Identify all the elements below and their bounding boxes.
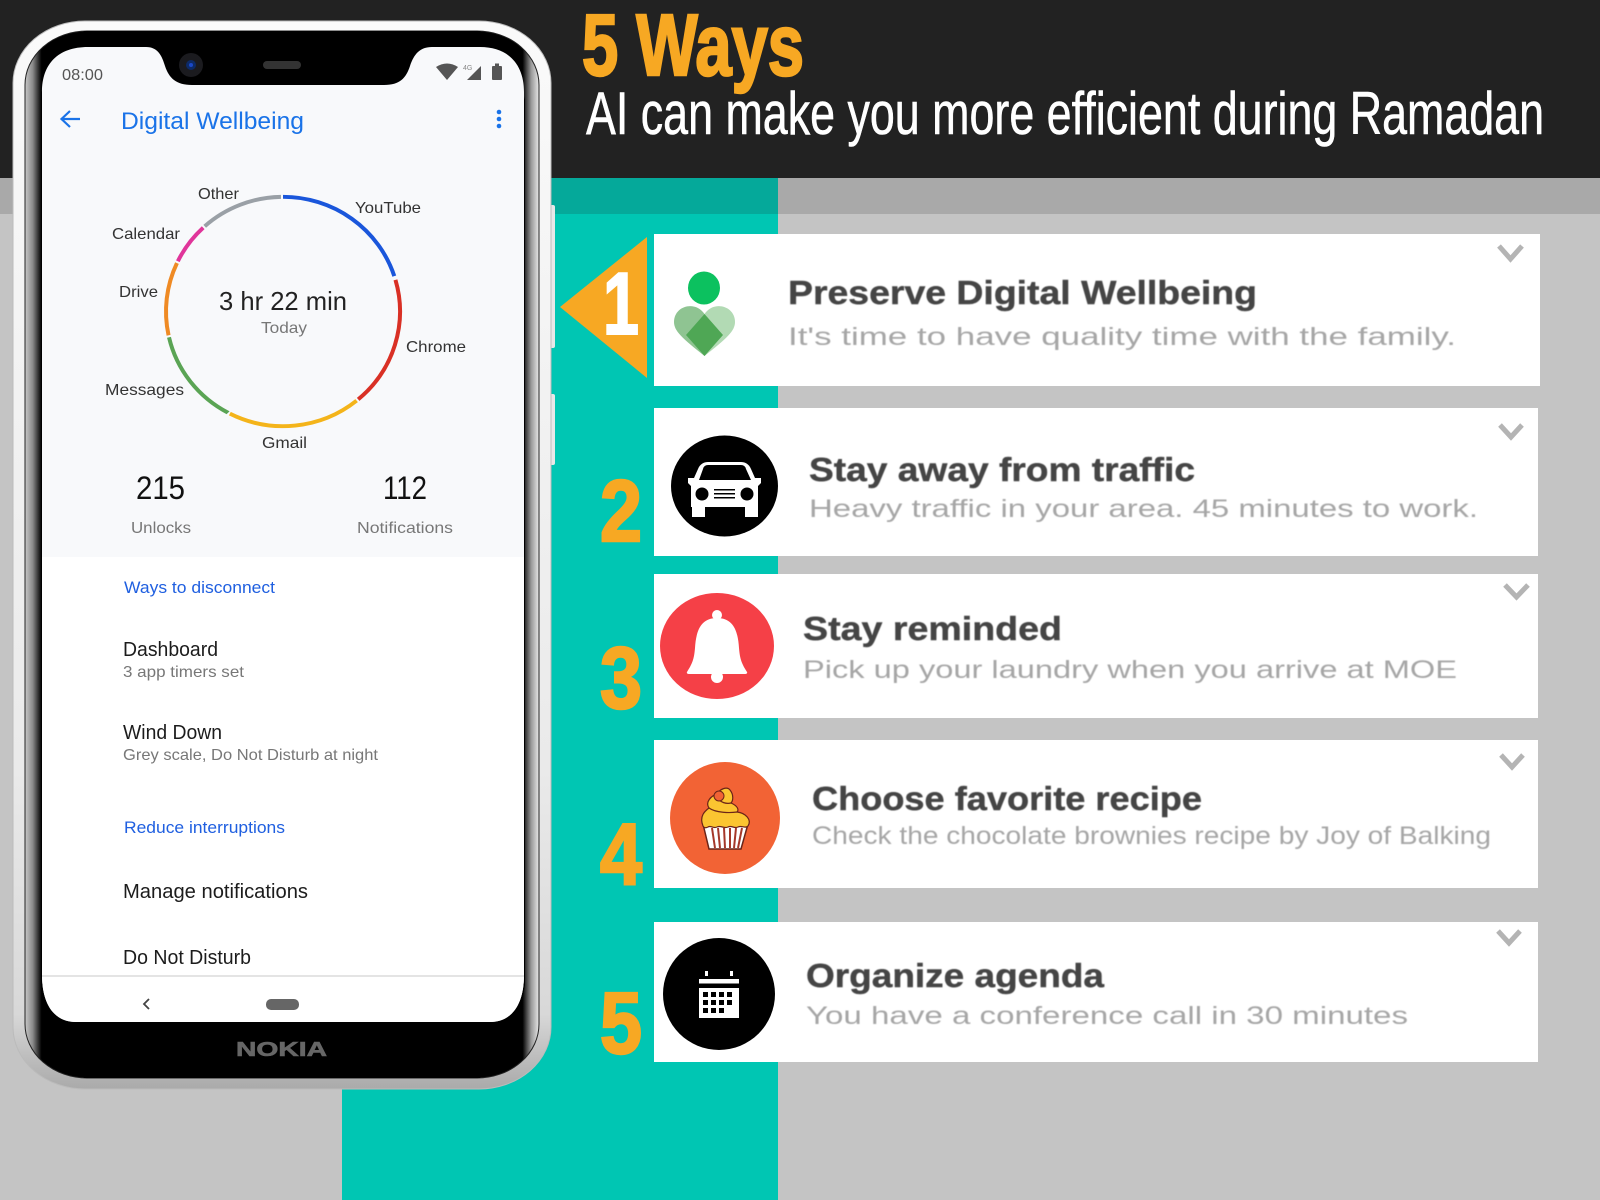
phone frame bbox=[13, 21, 551, 1089]
icon: chevron bbox=[1499, 246, 1522, 259]
settings list: Grey scale, Do Not Disturb at night bbox=[123, 747, 379, 764]
phone screen bbox=[42, 47, 524, 1022]
speaker bbox=[263, 61, 301, 69]
heading: Organize agenda bbox=[806, 957, 1105, 994]
heading: Choose favorite recipe bbox=[812, 780, 1202, 817]
ring labels: Messages bbox=[105, 382, 184, 399]
status time: 08:00 bbox=[62, 67, 103, 84]
status icons: 4G bbox=[463, 65, 472, 72]
icon: chevron bbox=[1501, 755, 1523, 767]
ring labels: Other bbox=[198, 186, 240, 203]
settings list: Manage notifications bbox=[123, 881, 308, 903]
panel: stay away from traffic bbox=[654, 408, 1538, 556]
ring labels: YouTube bbox=[355, 200, 421, 217]
ring centre total bbox=[219, 286, 347, 337]
description: You have a conference call in 30 minutes bbox=[806, 1002, 1408, 1030]
back arrow bbox=[62, 111, 80, 127]
panel: choose favorite recipe bbox=[654, 740, 1538, 888]
number 2: 2 bbox=[600, 463, 642, 560]
ring centre total: Today bbox=[261, 320, 307, 337]
settings list: Reduce interruptions bbox=[124, 819, 285, 837]
number 4: 4 bbox=[600, 806, 642, 903]
ring labels: Drive bbox=[119, 284, 158, 301]
stat: notifications: 112 bbox=[383, 470, 427, 506]
panel: stay reminded bbox=[654, 574, 1538, 718]
panel: preserve digital wellbeing bbox=[654, 234, 1540, 386]
heading: Stay away from traffic bbox=[809, 451, 1195, 488]
description: Check the chocolate brownies recipe by Joy of Balking bbox=[812, 822, 1491, 850]
icon: digital wellbeing bbox=[674, 272, 735, 356]
navigation bar bbox=[42, 975, 524, 1010]
panel: organize agenda bbox=[654, 922, 1538, 1062]
callout arrow 1: 1 bbox=[603, 254, 639, 353]
number 5: 5 bbox=[600, 975, 642, 1072]
usage ring chart bbox=[118, 150, 448, 473]
ring labels: Chrome bbox=[406, 339, 466, 356]
stat: unlocks: Unlocks bbox=[131, 520, 191, 537]
description: Pick up your laundry when you arrive at MOE bbox=[803, 656, 1457, 684]
front camera bbox=[179, 53, 203, 77]
overflow menu bbox=[497, 110, 501, 128]
description: Heavy traffic in your area. 45 minutes to work. bbox=[809, 495, 1478, 523]
settings list: Dashboard bbox=[123, 639, 218, 661]
ring labels: Calendar bbox=[112, 226, 181, 243]
icon: bell bbox=[660, 593, 774, 699]
phone side buttons bbox=[549, 205, 555, 465]
settings list: Ways to disconnect bbox=[124, 579, 275, 597]
ring labels bbox=[105, 186, 466, 452]
stat: unlocks: 215 bbox=[136, 470, 185, 506]
settings list: Wind Down bbox=[123, 722, 222, 744]
phone mockup bbox=[13, 21, 555, 1089]
description: It's time to have quality time with the family. bbox=[788, 323, 1456, 351]
app title: Digital Wellbeing bbox=[121, 108, 304, 135]
ring labels: Gmail bbox=[262, 435, 307, 452]
stat: notifications bbox=[357, 470, 453, 537]
icon: cupcake bbox=[670, 762, 780, 874]
brand logo: NOKIA bbox=[236, 1039, 327, 1061]
callout arrow 1 bbox=[560, 237, 647, 378]
header bar bbox=[0, 0, 1600, 178]
ring centre total: 3 hr 22 min bbox=[219, 286, 347, 316]
status icons bbox=[436, 64, 502, 80]
heading: Preserve Digital Wellbeing bbox=[788, 274, 1257, 311]
icon: chevron bbox=[1498, 931, 1520, 943]
icon: car bbox=[671, 436, 778, 536]
number 3: 3 bbox=[600, 630, 642, 727]
icon: calendar bbox=[663, 938, 775, 1050]
icon: chevron bbox=[1505, 585, 1528, 597]
icon: chevron bbox=[1500, 425, 1522, 437]
stat: notifications: Notifications bbox=[357, 520, 453, 537]
settings list bbox=[123, 579, 379, 969]
stat: unlocks bbox=[131, 470, 191, 537]
heading: Stay reminded bbox=[803, 610, 1062, 647]
settings list: Do Not Disturb bbox=[123, 947, 251, 969]
settings list: 3 app timers set bbox=[123, 664, 245, 681]
